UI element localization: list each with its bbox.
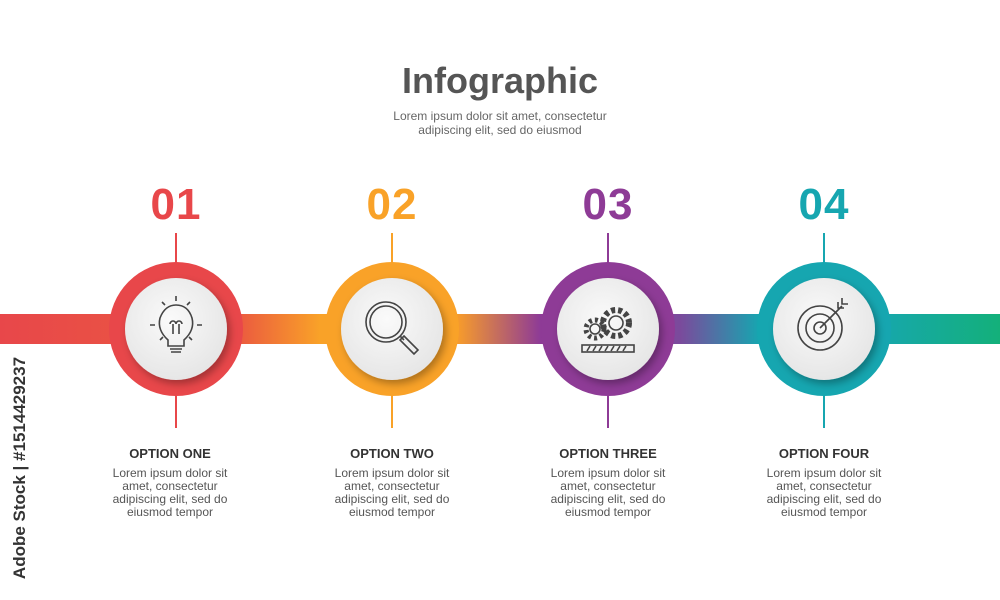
option three text: amet, consectetur [560, 479, 656, 493]
option two text: adipiscing elit, sed do [335, 492, 449, 506]
option four text: OPTION FOUR [779, 446, 869, 461]
option two text: amet, consectetur [344, 479, 440, 493]
step 3 circle [541, 233, 675, 428]
option one text: adipiscing elit, sed do [113, 492, 227, 506]
number 03: 03 [583, 180, 633, 229]
option two text [335, 446, 450, 519]
option four text: Lorem ipsum dolor sit [767, 466, 881, 480]
icon: bulb [150, 296, 202, 352]
option one text: Lorem ipsum dolor sit [113, 466, 227, 480]
icon: target [798, 298, 848, 350]
option one text: OPTION ONE [129, 446, 211, 461]
number 01: 01 [151, 180, 201, 229]
option two text: eiusmod tempor [349, 505, 435, 519]
icon: gears [582, 310, 634, 352]
option four text: amet, consectetur [776, 479, 872, 493]
step 1 circle [109, 233, 243, 428]
option one text: eiusmod tempor [127, 505, 213, 519]
option one text [113, 446, 228, 519]
number 04: 04 [799, 180, 849, 229]
subtitle: Lorem ipsum dolor sit amet, consectetur adipiscing elit, sed do eiusmod [393, 109, 607, 137]
option three text: Lorem ipsum dolor sit [551, 466, 665, 480]
icon: magnifier [366, 302, 418, 354]
step 2 circle [325, 233, 459, 428]
option three text [551, 446, 666, 519]
option four text: eiusmod tempor [781, 505, 867, 519]
option four text [767, 446, 882, 519]
option three text: OPTION THREE [559, 446, 657, 461]
band [0, 314, 1000, 344]
option two text: OPTION TWO [350, 446, 434, 461]
option four text: adipiscing elit, sed do [767, 492, 881, 506]
option two text: Lorem ipsum dolor sit [335, 466, 449, 480]
watermark id: Adobe Stock | #1514429237 [10, 357, 29, 579]
step 4 circle [757, 233, 891, 428]
option three text: eiusmod tempor [565, 505, 651, 519]
title: Infographic [402, 60, 598, 101]
number 02: 02 [367, 180, 417, 229]
option one text: amet, consectetur [122, 479, 218, 493]
option three text: adipiscing elit, sed do [551, 492, 665, 506]
